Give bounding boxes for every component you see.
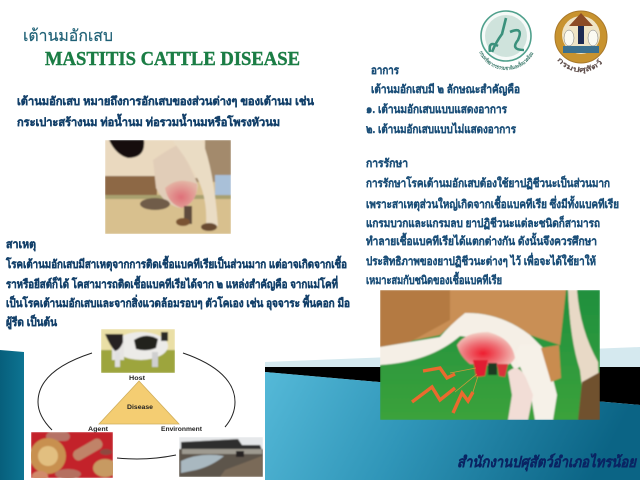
photo: cow udder with pain marks [380, 290, 600, 420]
cause paragraph: เป็นโรคเต้านมอักเสบและจากสิ่งแวดล้อมรอบๆ ตัวโคเอง เช่น อุจจาระ พื้นคอก มือ [6, 294, 350, 311]
pain lines [450, 368, 478, 392]
environment label: Environment [161, 426, 203, 433]
treatment paragraph [366, 175, 619, 287]
symptoms list [366, 82, 520, 136]
treatment heading: การรักษา [366, 157, 408, 170]
host label: Host [129, 375, 146, 382]
treatment section [366, 157, 619, 287]
cause section [5, 239, 350, 330]
logo: gold livestock department seal [554, 10, 608, 74]
treatment paragraph: แกรมบวกและแกรมลบ ยาปฏิชีวนะแต่ละชนิดก็สามารถ [366, 215, 600, 230]
cause paragraph [5, 255, 350, 330]
photo: inflamed udder [105, 140, 231, 234]
disease triad diagram [30, 329, 263, 480]
definition text: เต้านมอักเสบ หมายถึงการอักเสบของส่วนต่างๆ ของเต้านม เช่น [17, 95, 314, 108]
symptoms list: ๒. เต้านมอักเสบแบบไม่แสดงอาการ [366, 122, 517, 136]
English title: MASTITIS CATTLE DISEASE [45, 49, 300, 70]
treatment paragraph: ทำลายเชื้อแบคทีเรียได้แตกต่างกัน ดังนั้นจึงควรศึกษา [366, 232, 597, 248]
treatment paragraph: เหมาะสมกับชนิดของเชื้อแบคทีเรีย [366, 271, 502, 287]
photo: farm environment [179, 437, 263, 477]
cause heading: สาเหตุ [6, 239, 36, 252]
symptoms list: ๑. เต้านมอักเสบแบบแสดงอาการ [366, 103, 508, 116]
cause paragraph: ผู้รีด เป็นต้น [6, 314, 57, 330]
photo: bacteria agent [30, 432, 117, 480]
definition text: กระเปาะสร้างนม ท่อน้ำนม ท่อรวมน้ำนมหรือโพรงหัวนม [17, 113, 280, 129]
symptoms section [366, 65, 520, 136]
title block [23, 27, 300, 70]
triangle: disease [99, 381, 179, 424]
cause paragraph: ราหรือยีสต์ก็ได้ โคสามารถติดเชื้อแบคทีเรียได้จาก ๒ แหล่งสำคัญคือ จากแม่โคที่ [6, 275, 338, 291]
Thai title: เต้านมอักเสบ [23, 27, 113, 45]
connecting arcs [38, 353, 235, 459]
agent label: Agent [88, 426, 109, 433]
symptoms list: เต้านมอักเสบมี ๒ ลักษณะสำคัญคือ [371, 82, 520, 96]
logo: green royal seal [479, 10, 534, 70]
treatment paragraph: ประสิทธิภาพของยาปฏิชีวนะต่างๆ ไว้ เพื่อจะได้ใช้ยาให้ [366, 252, 596, 268]
symptoms heading: อาการ [371, 65, 400, 77]
pain bolts [412, 368, 473, 413]
logo: green royal seal: กรมทรัพยากรธรรมชาติและสิ่งแวดล้อม [479, 51, 534, 70]
definition text [17, 95, 314, 129]
photo: host cow [101, 329, 175, 373]
cause paragraph: โรคเต้านมอักเสบมีสาเหตุจากการติดเชื้อแบคทีเรียเป็นส่วนมาก แต่อาจเกิดจากเชื้อ [5, 255, 347, 272]
triangle: disease: Disease [127, 404, 153, 411]
decorative background: teal wave [0, 347, 640, 480]
logo: gold livestock department seal: กรมปศุสัตว์ [557, 58, 602, 74]
